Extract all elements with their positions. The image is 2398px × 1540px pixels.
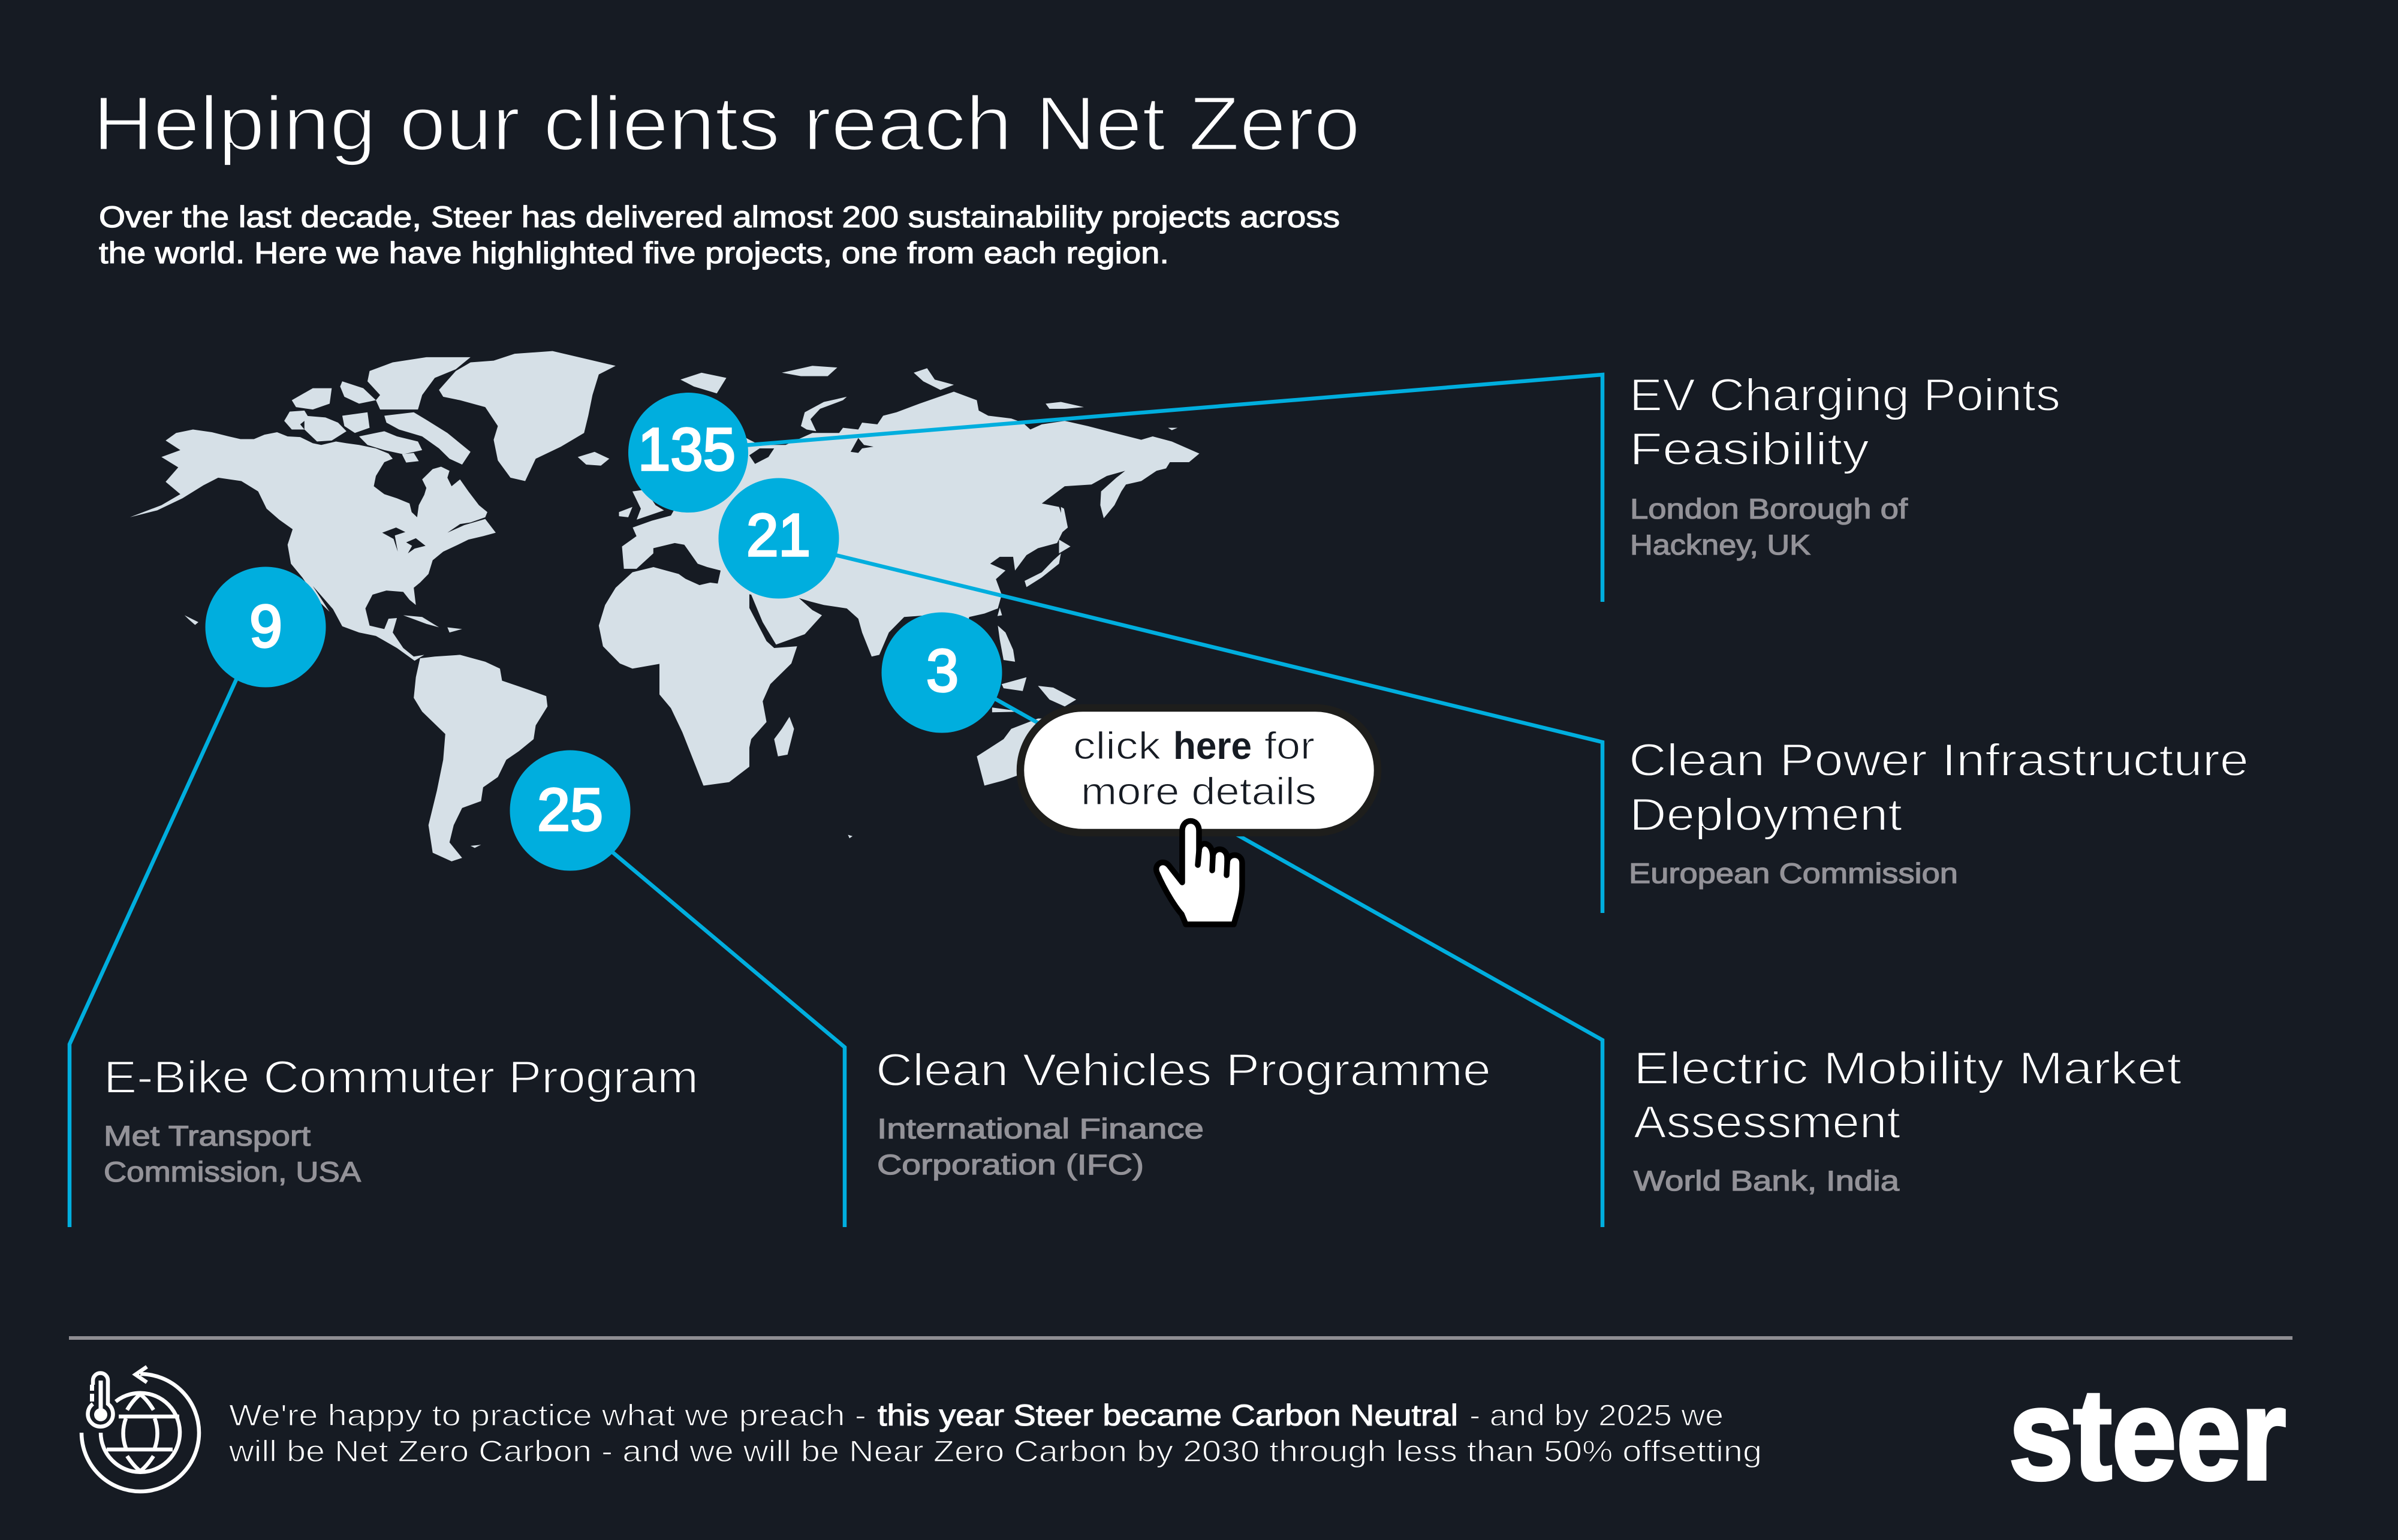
callout: click here for more details xyxy=(1020,708,1378,833)
project: Clean Power Infrastructure Deployment: Clean Power Infrastructure xyxy=(1629,735,2249,786)
title: Helping our clients reach Net Zero xyxy=(93,81,1360,167)
Eurasia xyxy=(622,391,1200,656)
marker: 9 projects xyxy=(205,567,326,687)
Taiwan and Philippines xyxy=(998,608,1002,616)
project: Clean Vehicles Programme: International Finance xyxy=(877,1113,1204,1144)
Kerguelen xyxy=(848,835,852,838)
intro text xyxy=(99,200,1340,270)
callout: click here for more details: for xyxy=(1264,724,1315,767)
marker: 3 projects: 3 xyxy=(926,637,959,704)
Africa, eastern part xyxy=(659,571,797,786)
Sakhalin and Japan xyxy=(1061,507,1068,533)
marker: 25 projects xyxy=(510,751,631,870)
marker: 135 projects: 135 xyxy=(638,416,736,483)
marker: 135 projects xyxy=(628,393,748,513)
Falkland Islands xyxy=(471,845,481,848)
map: Eurasia, eastern Africa and Australia xyxy=(622,366,1200,838)
project: EV Charging Points Feasibility: Feasibility xyxy=(1629,424,1869,475)
project: Clean Vehicles Programme: Corporation (IFC) xyxy=(877,1149,1144,1180)
icon: globe with thermometer and circular arrow xyxy=(82,1367,199,1491)
connector: 135 to EV Charging Points xyxy=(743,375,1602,602)
White Sea xyxy=(749,448,774,464)
project: Electric Mobility Market Assessment: World Bank, India xyxy=(1634,1165,1900,1197)
footer divider xyxy=(69,1336,2292,1340)
Caribbean islands xyxy=(403,615,439,628)
project: Clean Vehicles Programme: Clean Vehicles Programme xyxy=(876,1045,1491,1096)
Novaya Zemlya xyxy=(801,397,847,431)
callout: click here for more details: here xyxy=(1173,724,1252,767)
project: EV Charging Points Feasibility: London Borough of xyxy=(1630,493,1908,525)
Africa, western part xyxy=(599,567,749,786)
icon: pointing hand cursor xyxy=(1156,821,1242,924)
connector: 9 to E-Bike Commuter Program xyxy=(70,674,239,1227)
intro text: the world. Here we have highlighted five projects, one from each region. xyxy=(99,236,1169,270)
project: Electric Mobility Market Assessment xyxy=(1634,1043,2182,1197)
footer statement: We're happy to practice what we preach - xyxy=(229,1399,866,1432)
connector lines xyxy=(70,375,1602,1227)
project: E-Bike Commuter Program xyxy=(104,1052,698,1188)
project: EV Charging Points Feasibility: EV Charging Points xyxy=(1629,370,2060,421)
footer statement: - and by 2025 we xyxy=(1469,1399,1724,1432)
footer statement: will be Net Zero Carbon - and we will be Near Zero Carbon by 2030 through less than 50% offsetting xyxy=(228,1434,1762,1468)
project: E-Bike Commuter Program: E-Bike Commuter Program xyxy=(104,1052,698,1103)
map: Americas, Greenland and western Africa xyxy=(130,351,749,861)
project: E-Bike Commuter Program: Met Transport xyxy=(104,1120,311,1152)
Arctic islands xyxy=(384,412,471,465)
Arctic archipelagos xyxy=(680,373,727,393)
marker: 21 projects xyxy=(718,478,839,598)
project: Clean Power Infrastructure Deployment: Deployment xyxy=(1629,789,1902,840)
project: EV Charging Points Feasibility xyxy=(1629,370,2060,560)
Australia xyxy=(977,719,1080,786)
connector: 3 to Electric Mobility Market xyxy=(992,697,1602,1227)
marker: 21 projects: 21 xyxy=(746,502,811,569)
Great Lakes xyxy=(382,528,405,551)
marker: 25 projects: 25 xyxy=(537,776,603,843)
United Kingdom and Ireland xyxy=(632,490,664,520)
project: EV Charging Points Feasibility: Hackney, UK xyxy=(1630,529,1810,560)
Gulf of Ob xyxy=(851,438,873,453)
Madagascar xyxy=(774,717,794,757)
project: E-Bike Commuter Program: Commission, USA xyxy=(104,1156,361,1188)
project: Electric Mobility Market Assessment: Assessment xyxy=(1634,1097,1900,1148)
project: Clean Vehicles Programme xyxy=(876,1045,1491,1180)
North America xyxy=(130,429,496,661)
logo: steer: steer xyxy=(2009,1362,2286,1506)
footer statement xyxy=(228,1399,1762,1468)
Indonesia and New Guinea xyxy=(1002,677,1026,691)
Greenland xyxy=(439,351,616,481)
marker: 3 projects xyxy=(881,613,1002,733)
callout: click here for more details: more details xyxy=(1081,770,1317,813)
connector: 21 to Clean Power Infrastructure xyxy=(833,554,1602,913)
Iceland xyxy=(578,452,609,466)
project: Clean Power Infrastructure Deployment xyxy=(1629,735,2249,889)
world map xyxy=(130,351,1200,861)
Hawaii xyxy=(185,615,198,625)
marker: 9 projects: 9 xyxy=(249,593,282,660)
footer statement: this year Steer became Carbon Neutral xyxy=(878,1399,1458,1432)
intro text: Over the last decade, Steer has delivered almost 200 sustainability projects across xyxy=(99,200,1340,234)
South America xyxy=(414,655,547,861)
connector: 25 to Clean Vehicles Programme xyxy=(608,849,845,1227)
callout: click here for more details: click xyxy=(1073,724,1161,767)
project: Clean Power Infrastructure Deployment: European Commission xyxy=(1629,857,1958,889)
project: Electric Mobility Market Assessment: Electric Mobility Market xyxy=(1634,1043,2182,1094)
